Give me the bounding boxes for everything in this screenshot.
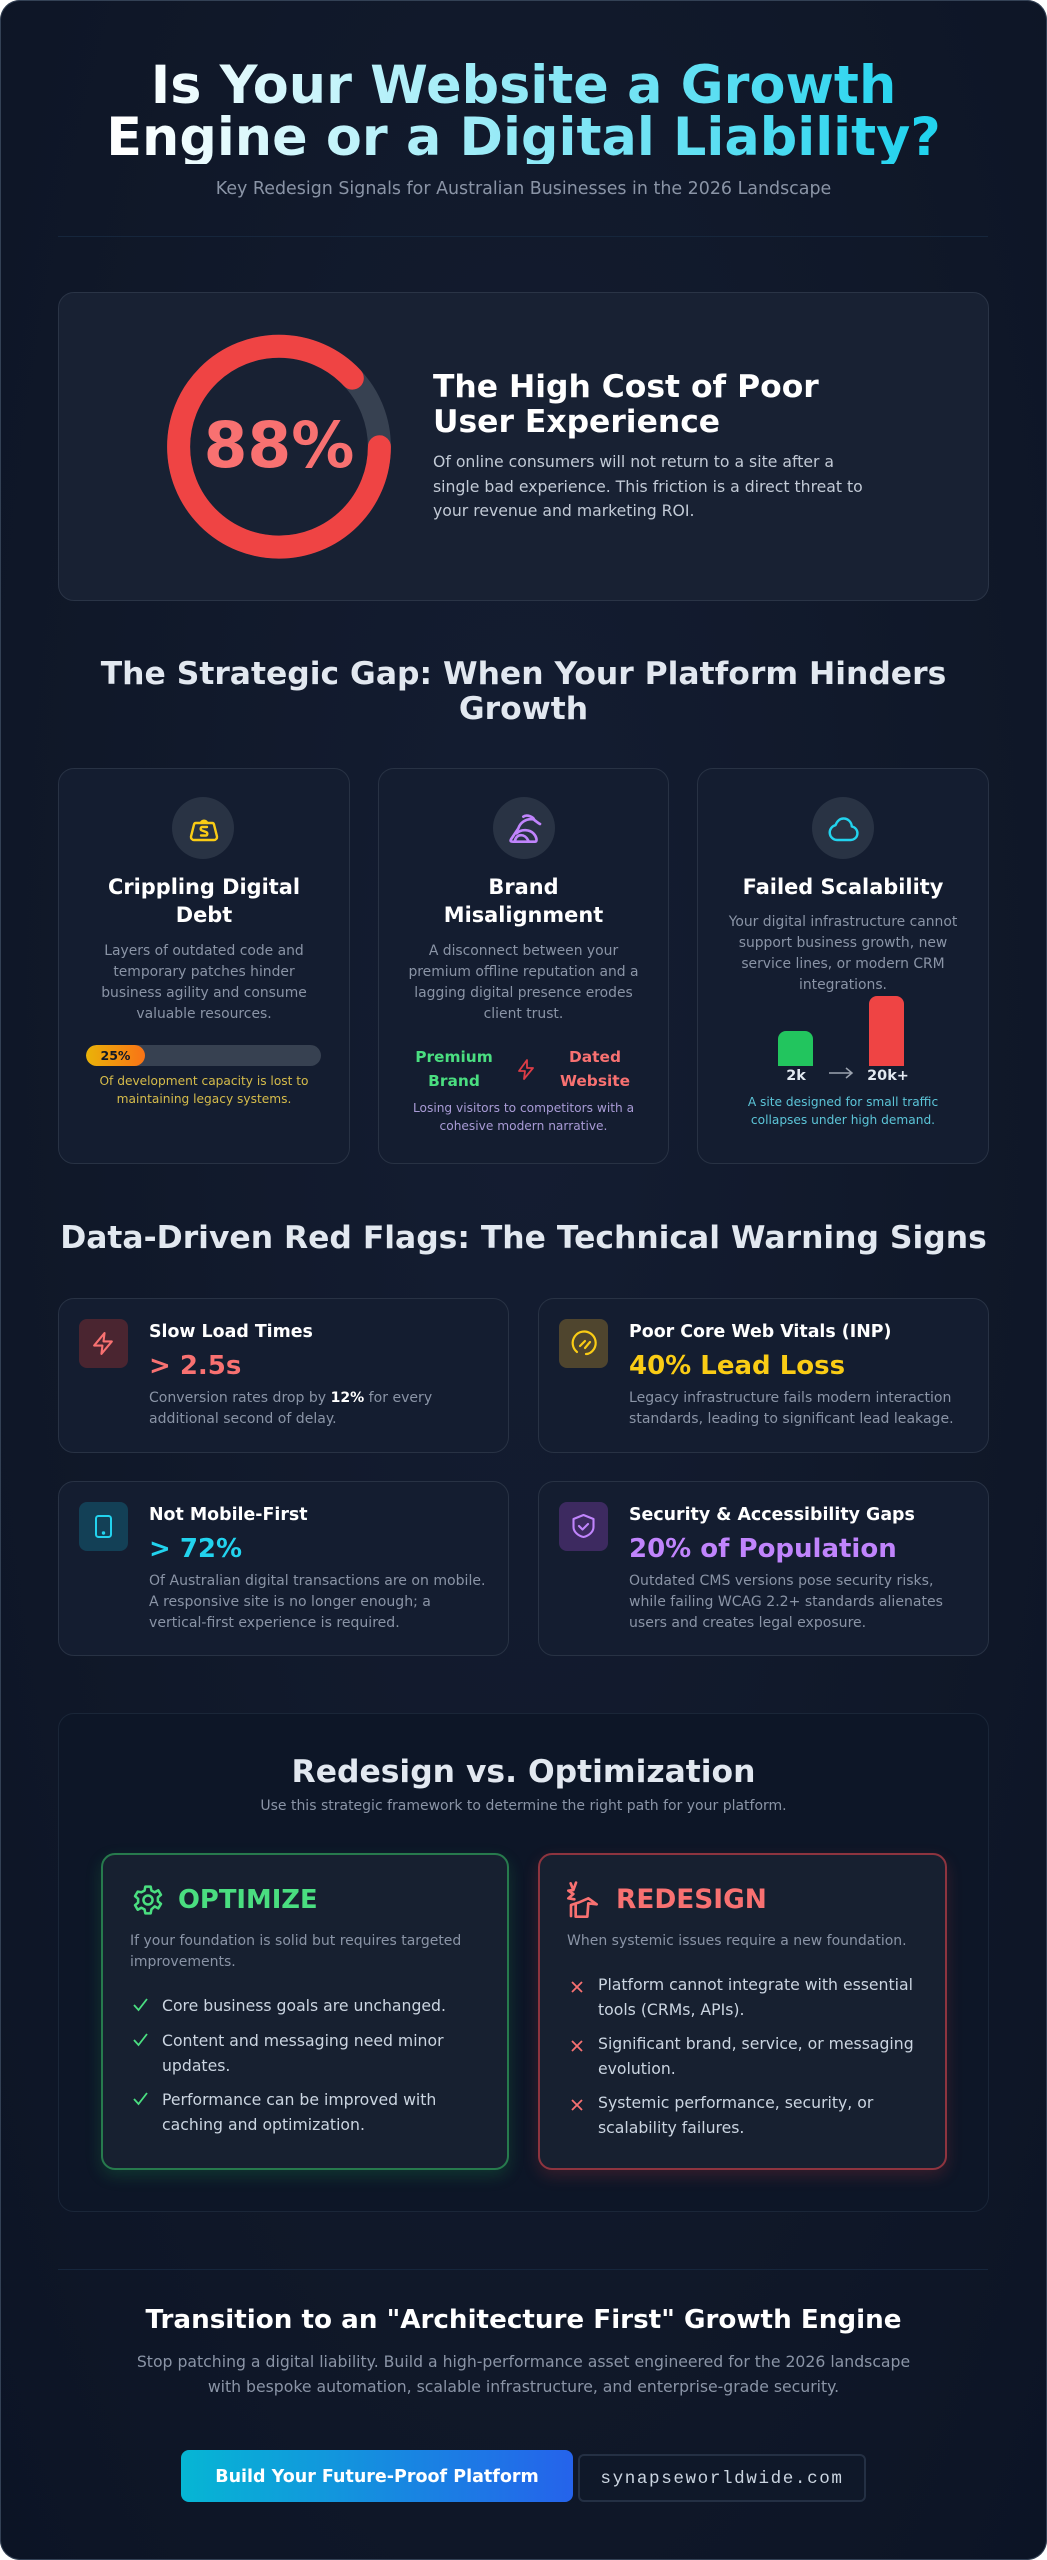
panel: brand misalignment xyxy=(378,768,669,1164)
bar: 20k+ xyxy=(869,996,904,1066)
label: 2k: 2k xyxy=(786,1068,806,1084)
flag description: additional second of delay. xyxy=(149,1411,337,1427)
redesign title: REDESIGN xyxy=(616,1884,767,1915)
card title: Crippling Digital xyxy=(108,875,300,899)
redesign description: When systemic issues require a new foundation. xyxy=(567,1933,907,1949)
list item xyxy=(133,2090,436,2134)
flag value: 40% Lead Loss xyxy=(629,1351,845,1381)
list item: Platform cannot integrate with essential xyxy=(598,1975,913,1994)
button: CTA xyxy=(181,2450,573,2502)
list item: tools (CRMs, APIs). xyxy=(598,2000,744,2018)
hero heading: The High Cost of Poor xyxy=(433,369,819,405)
framework heading: Redesign vs. Optimization xyxy=(292,1754,755,1790)
list item xyxy=(571,2034,914,2078)
flag value: 20% of Population xyxy=(629,1534,897,1564)
card description xyxy=(408,943,639,1022)
panel: security and accessibility xyxy=(538,1481,989,1656)
icon: shield xyxy=(559,1502,608,1551)
label: dated website: Website xyxy=(560,1072,630,1090)
brand caption: Losing visitors to competitors with a xyxy=(413,1101,634,1115)
footer description: with bespoke automation, scalable infrastructure, and enterprise-grade security. xyxy=(208,2376,839,2396)
list item: caching and optimization. xyxy=(162,2114,365,2134)
flag description: vertical-first experience is required. xyxy=(149,1615,400,1631)
card title xyxy=(108,875,300,927)
card description xyxy=(728,914,957,993)
card description: Layers of outdated code and xyxy=(104,943,304,959)
url box xyxy=(578,2454,866,2502)
progress bar: 25%: 25% xyxy=(101,1048,130,1063)
brand caption: cohesive modern narrative. xyxy=(440,1118,607,1132)
card description: temporary patches hinder xyxy=(113,964,295,980)
flag description xyxy=(629,1390,954,1427)
list item: Content and messaging need minor xyxy=(162,2031,444,2050)
card description: premium offline reputation and a xyxy=(408,964,639,980)
footer description: Stop patching a digital liability. Build a high-performance asset engineered for the 2026 landscape xyxy=(137,2352,910,2371)
icon: phone xyxy=(79,1502,128,1551)
card title: Debt xyxy=(176,903,232,927)
list item: Systemic performance, security, or xyxy=(598,2093,873,2112)
flag description: users and creates legal exposure. xyxy=(629,1615,866,1631)
list item xyxy=(571,1975,913,2018)
flag description xyxy=(629,1573,943,1631)
list item: evolution. xyxy=(598,2058,676,2078)
list: redesign xyxy=(571,1975,914,2136)
flag description: while failing WCAG 2.2+ standards alienates xyxy=(629,1594,943,1610)
flag title: Not Mobile-First xyxy=(149,1505,308,1525)
hero description xyxy=(433,452,863,520)
flag description: Legacy infrastructure fails modern interaction xyxy=(629,1390,951,1406)
list item: Performance can be improved with xyxy=(162,2090,436,2109)
progress caption: maintaining legacy systems. xyxy=(117,1092,291,1106)
label: dated website xyxy=(560,1048,630,1090)
icon glyph: brand xyxy=(509,814,542,843)
icon: bolt xyxy=(79,1319,128,1368)
icon glyph: cloud xyxy=(828,817,859,842)
card description: Your digital infrastructure cannot xyxy=(729,914,957,930)
card description: valuable resources. xyxy=(136,1006,272,1022)
footer heading: Transition to an "Architecture First" Growth Engine xyxy=(146,2305,901,2335)
icon: bolt mismatch xyxy=(518,1059,534,1080)
scalability caption: A site designed for small traffic xyxy=(748,1095,938,1109)
hero description: Of online consumers will not return to a site after a xyxy=(433,452,834,471)
bar chart: traffic xyxy=(778,996,909,1084)
icon glyph: money xyxy=(190,820,218,842)
stat: 88%: 88% xyxy=(204,409,354,482)
flag title: Poor Core Web Vitals (INP) xyxy=(629,1322,891,1342)
panel: crippling digital debt xyxy=(58,768,350,1164)
hero description: your revenue and marketing ROI. xyxy=(433,501,694,520)
card description: business agility and consume xyxy=(101,985,307,1001)
title: Is Your Website a Growth xyxy=(151,55,896,116)
list item xyxy=(133,2031,444,2074)
arrow xyxy=(829,1068,853,1078)
url box: synapseworldwide.com xyxy=(600,2469,844,2489)
scalability caption xyxy=(748,1095,938,1126)
title xyxy=(0,60,1047,164)
brand caption xyxy=(413,1101,634,1132)
panel: optimize xyxy=(101,1853,509,2170)
label: premium brand: Brand xyxy=(428,1072,480,1090)
flag description: Outdated CMS versions pose security risks, xyxy=(629,1573,933,1589)
heading: red flags: Data-Driven Red Flags: The Technical Warning Signs xyxy=(60,1220,987,1256)
footer description xyxy=(137,2352,910,2396)
card title: Brand xyxy=(488,875,559,899)
card title: Misalignment xyxy=(444,903,603,927)
progress caption xyxy=(99,1074,309,1106)
hero description: single bad experience. This friction is a direct threat to xyxy=(433,476,863,496)
icon: brand xyxy=(493,797,555,859)
label: premium brand: Premium xyxy=(415,1048,493,1066)
card description: client trust. xyxy=(484,1006,563,1022)
panel: failed scalability xyxy=(697,768,989,1164)
title: Engine or a Digital Liability? xyxy=(106,107,941,168)
panel: redesign vs optimization xyxy=(58,1713,989,2212)
hero heading xyxy=(433,369,819,440)
icon: gear xyxy=(134,1885,162,1915)
panel: slow load times xyxy=(58,1298,509,1453)
icon: cloud xyxy=(812,797,874,859)
flag description: Of Australian digital transactions are on mobile. xyxy=(149,1573,485,1589)
hero heading: User Experience xyxy=(433,404,720,440)
list item xyxy=(571,2093,874,2136)
button: CTA: Build Your Future-Proof Platform xyxy=(215,2467,539,2487)
bar: 2k xyxy=(778,1031,813,1066)
list item: updates. xyxy=(162,2056,230,2074)
flag description: A responsive site is no longer enough; a xyxy=(149,1594,431,1610)
flag value: > 2.5s xyxy=(149,1351,241,1381)
subtitle: Key Redesign Signals for Australian Businesses in the 2026 Landscape xyxy=(216,179,831,199)
list item: scalability failures. xyxy=(598,2118,744,2136)
panel: redesign xyxy=(538,1853,947,2170)
progress bar: 25% xyxy=(86,1045,321,1066)
flag description: Conversion rates drop by 12% for every xyxy=(149,1390,432,1406)
card description: support business growth, new xyxy=(739,935,947,951)
panel: hero stat xyxy=(58,292,989,601)
framework subtitle: Use this strategic framework to determine the right path for your platform. xyxy=(260,1798,787,1814)
flag description xyxy=(149,1390,432,1427)
panel: core web vitals xyxy=(538,1298,989,1453)
label: 20k+: 20k+ xyxy=(867,1068,909,1084)
card description: A disconnect between your xyxy=(429,943,618,959)
icon: money bag xyxy=(172,797,234,859)
list item: Core business goals are unchanged. xyxy=(162,1996,446,2015)
flag description: standards, leading to significant lead leakage. xyxy=(629,1411,954,1427)
card description xyxy=(101,943,307,1022)
card title xyxy=(444,875,603,927)
optimize description xyxy=(130,1933,461,1970)
flag title: Slow Load Times xyxy=(149,1322,313,1342)
optimize description: If your foundation is solid but requires targeted xyxy=(130,1933,461,1949)
icon: redesign tool xyxy=(566,1881,598,1918)
card description: integrations. xyxy=(799,977,887,993)
label: premium brand xyxy=(415,1048,493,1090)
label: dated website: Dated xyxy=(569,1048,621,1066)
list item: Significant brand, service, or messaging xyxy=(598,2034,914,2053)
card title: Failed Scalability xyxy=(743,875,943,899)
panel: not mobile-first xyxy=(58,1481,509,1656)
card description: service lines, or modern CRM xyxy=(741,956,945,972)
flag description xyxy=(149,1573,485,1631)
flag value: > 72% xyxy=(149,1534,242,1564)
icon: gauge xyxy=(559,1319,608,1368)
optimize description: improvements. xyxy=(130,1954,236,1970)
scalability caption: collapses under high demand. xyxy=(751,1112,935,1126)
flag title: Security & Accessibility Gaps xyxy=(629,1505,915,1525)
optimize title: OPTIMIZE xyxy=(178,1885,318,1915)
heading: strategic gap: The Strategic Gap: When Your Platform Hinders xyxy=(101,656,946,692)
heading: strategic gap: Growth xyxy=(459,691,588,727)
card description: lagging digital presence erodes xyxy=(414,985,633,1001)
list: optimize xyxy=(133,1996,446,2134)
heading: strategic gap xyxy=(100,656,946,727)
donut chart: 88% xyxy=(167,334,391,559)
progress caption: Of development capacity is lost to xyxy=(99,1074,309,1088)
